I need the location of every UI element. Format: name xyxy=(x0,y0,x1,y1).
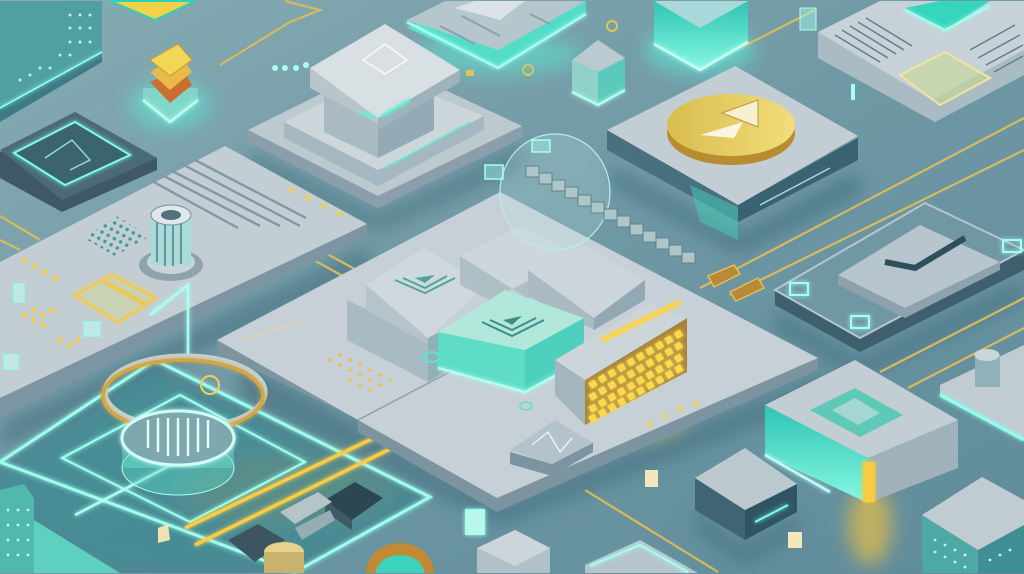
bottom small components xyxy=(158,470,802,573)
scattered small chips xyxy=(272,8,855,100)
bottom centre dark cube xyxy=(695,448,797,540)
glass pins xyxy=(4,284,100,369)
small dark chip xyxy=(510,420,593,476)
bottom right dotted cube xyxy=(922,477,1024,573)
top centre teal chip xyxy=(407,1,586,68)
left circuit panel xyxy=(0,146,367,418)
central platform xyxy=(217,192,818,512)
gold capacitors xyxy=(708,265,764,301)
dot grid xyxy=(84,216,150,256)
block: teal centre xyxy=(438,290,584,392)
icon: gold coin xyxy=(667,94,795,165)
glass orb with chip row xyxy=(441,134,695,263)
neon square hologram xyxy=(0,356,430,573)
block: back xyxy=(460,226,590,300)
bottom left dotted tower xyxy=(0,484,120,573)
top left dark chip xyxy=(0,112,157,212)
small teal cube xyxy=(572,40,625,105)
top centre pedestal xyxy=(248,24,522,208)
icon: gold ring xyxy=(103,356,265,432)
top gold chip xyxy=(110,1,195,20)
chip with gold coin xyxy=(607,66,858,262)
right chip with check mark xyxy=(775,203,1024,352)
block: right xyxy=(528,243,645,330)
right edge cylinder chip xyxy=(940,345,1024,440)
block: left xyxy=(347,248,486,382)
top cube teal xyxy=(654,1,748,70)
gold chip xyxy=(75,275,155,322)
block: gold windows xyxy=(555,302,687,425)
top right circuit building xyxy=(818,1,1024,122)
bottom centre teal board xyxy=(585,540,698,573)
icon: glowing cylinder xyxy=(122,411,234,495)
soft object shadows xyxy=(0,145,1024,565)
top left dotted tower xyxy=(0,1,102,122)
bottom right teal block xyxy=(765,330,958,503)
icon: striped cylinder xyxy=(139,205,203,281)
gold stacked hologram icon xyxy=(143,44,198,122)
